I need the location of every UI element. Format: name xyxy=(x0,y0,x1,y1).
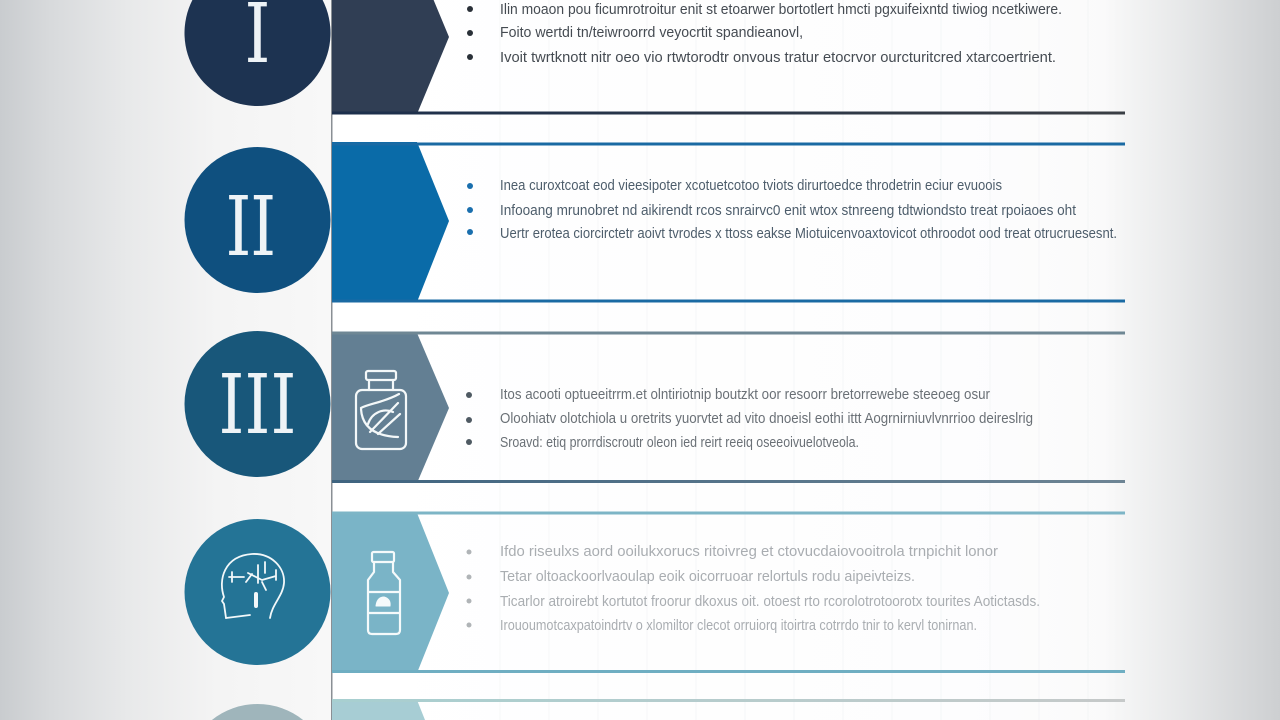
text block: row 1: Ivoit twrtknott nitr oeo vio rtwtorodtr onvous tratur etocrvor ourcturitcred xtarcoertrient. xyxy=(500,49,1056,66)
text block: row 4: Irououmotcaxpatoindrtv o xlomiltor clecot orruiorq itoirtra cotrrdo tnir to kervl tonirnan. xyxy=(500,617,977,634)
chevron: row 4 xyxy=(332,513,449,673)
row 3 xyxy=(184,331,1125,483)
text block: row 3 xyxy=(466,386,1033,451)
text block: row 2 xyxy=(467,177,1117,242)
row 2 xyxy=(184,142,1125,302)
text block: row 4 xyxy=(466,543,1040,634)
chevron: row 3 xyxy=(332,333,449,483)
circle: numeral III xyxy=(184,331,330,477)
rules: row 2 xyxy=(332,142,1125,302)
text block: row 1: Foito wertdi tn/teiwroorrd veyocrtit spandieanovl, xyxy=(500,24,803,41)
text block: row 4: Ifdo riseulxs aord ooilukxorucs ritoivreg et ctovucdaiovooitrola trnpichit lonor xyxy=(500,543,998,560)
rule: row 1 xyxy=(332,112,1125,114)
rule: row 5 xyxy=(332,699,1125,702)
circle: numeral II: II xyxy=(226,179,276,275)
text block: row 3: Oloohiatv olotchiolа u oretrits yuorvtet ad vito dnoeisl eothi ittt Aogrnirniuvlvnrrioo deireslrig xyxy=(500,410,1033,427)
chevron: row 5 xyxy=(332,700,425,720)
text block: row 2: Inea curoxtcoat eod vieesipoter xcotuetcotoo tviots dirurtoedce throdetrin eciur evuoois xyxy=(500,177,1002,194)
chevron: row 1 xyxy=(332,0,449,114)
icon: bottle xyxy=(368,552,400,634)
rules: row 4 xyxy=(332,512,1125,673)
text block: row 1 xyxy=(467,1,1062,66)
text block: row 2: Uertr erotea ciorcirctetr aoivt tvrodes x ttoss eakse Miotuicenvoaxtovicot othroodot ood treat otrucruesesnt. xyxy=(500,225,1117,242)
icon: head with molecule xyxy=(222,554,284,618)
text block: row 4: Ticarlor atroirebt kortutot froorur dkoxus oit. otoest rto rcorolotrotoorotx tourites Aotictasds. xyxy=(500,593,1040,610)
row 1 xyxy=(184,0,1125,114)
row 4 xyxy=(184,512,1125,673)
circle: row 5 xyxy=(212,704,303,720)
text block: row 1: Ilin moaon pou ficumrotroitur enit st etoarwer bortotlert hmcti pgxuifeixntd tiwiog ncetkiwere. xyxy=(500,1,1062,18)
text block: row 3: Sroavd: etiq prorrdiscroutr oleon ied reirt reeiq oseeoivuelotveola. xyxy=(500,434,859,451)
text block: row 2: Infoоang mrunobret nd aikirendt rcos snrairvc0 enit wtox stnreeng tdtwiondsto treat rpoiaoes oht xyxy=(500,202,1077,219)
circle: numeral I xyxy=(184,0,330,106)
circle: numeral II xyxy=(184,147,330,293)
rules: row 3 xyxy=(332,332,1125,483)
circle: head icon xyxy=(184,519,330,665)
circle: numeral III: III xyxy=(218,357,296,453)
text block: row 4: Tetar oltoackoorlvaoulap eoik oicorruoar relortuls rodu aipeivteizs. xyxy=(500,568,915,585)
icon: jar xyxy=(356,371,406,449)
row 5 xyxy=(212,699,1125,720)
chevron: row 2 xyxy=(332,142,449,302)
text block: row 3: Itos acooti optueeitrrm.et olntiriotnip boutzkt oor resoorr bretorrewebe steeoeg osur xyxy=(500,386,990,403)
